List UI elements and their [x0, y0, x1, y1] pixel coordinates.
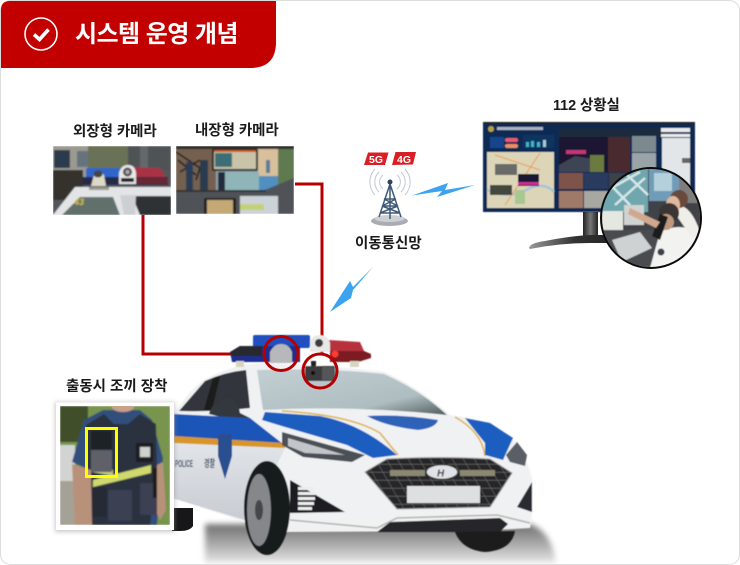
license plate — [407, 486, 480, 503]
monitor — [483, 122, 702, 268]
police car: POLICE — [175, 459, 193, 470]
photo: exterior camera — [53, 146, 171, 215]
orange side stripe — [174, 436, 285, 448]
lower bumper — [377, 518, 508, 532]
light bar — [230, 335, 371, 367]
connector: exterior camera to car — [143, 215, 266, 354]
front wheel — [244, 461, 290, 555]
yellow hood line — [282, 411, 485, 456]
grille lamps — [390, 470, 495, 476]
grille badge — [426, 464, 458, 480]
monitor stand — [529, 212, 620, 249]
right fog lamp — [517, 482, 532, 512]
label: 112 control room: 112 상황실 — [553, 97, 620, 114]
door emblem — [218, 434, 232, 479]
hood emblem — [367, 416, 438, 430]
blue side stripe — [174, 414, 283, 444]
connector: interior camera to car — [295, 184, 322, 354]
label: vest mounting: 출동시 조끼 장착 — [66, 378, 167, 395]
police car — [172, 335, 556, 563]
icon: mobile network tower — [370, 169, 410, 226]
map panel — [487, 152, 554, 208]
header banner — [1, 1, 276, 68]
window pillar — [204, 376, 220, 410]
label: interior camera: 내장형 카메라 — [195, 122, 279, 139]
car side panel — [172, 436, 285, 520]
label: mobile network: 이동통신망 — [355, 235, 422, 252]
icon: 5G and 4G badges: 5G — [369, 154, 383, 166]
side text: police Korean: 경찰 — [204, 457, 215, 470]
icon: 5G and 4G badges — [364, 152, 416, 166]
right headlight — [506, 442, 527, 466]
icon: lightning car to tower — [330, 267, 373, 312]
highlight circle: interior camera — [303, 354, 337, 388]
photo: exterior camera: 43 — [73, 197, 84, 207]
icon: lightning tower to control room — [412, 183, 475, 197]
icon: 5G and 4G badges: 4G — [397, 154, 411, 166]
side window — [179, 370, 250, 411]
exterior camera on roof — [270, 344, 292, 363]
highlight circle: exterior camera — [264, 336, 298, 370]
interior camera on windshield — [305, 361, 335, 381]
yellow highlight box — [86, 428, 116, 476]
front grille — [365, 458, 512, 509]
blue hood right — [465, 418, 513, 460]
side mirror — [209, 398, 250, 418]
left fog lamp — [290, 480, 345, 513]
car body — [172, 363, 533, 532]
rear wheel — [172, 508, 193, 531]
monitor screen — [483, 122, 695, 212]
photo: control room inset — [600, 168, 702, 268]
title: 시스템 운영 개념 — [75, 21, 238, 48]
photo: vest-mounted camera — [55, 402, 175, 532]
headlight lens — [288, 438, 345, 455]
headlight — [282, 432, 365, 462]
windshield — [257, 370, 447, 415]
label: exterior camera: 외장형 카메라 — [73, 123, 157, 140]
right front wheel — [455, 531, 515, 552]
grille badge: H — [437, 468, 445, 480]
blue hood left — [262, 412, 397, 458]
photo: interior camera — [176, 146, 294, 214]
icon: check circle — [25, 18, 57, 50]
bumper trim — [290, 515, 530, 528]
car shadow — [205, 524, 556, 563]
